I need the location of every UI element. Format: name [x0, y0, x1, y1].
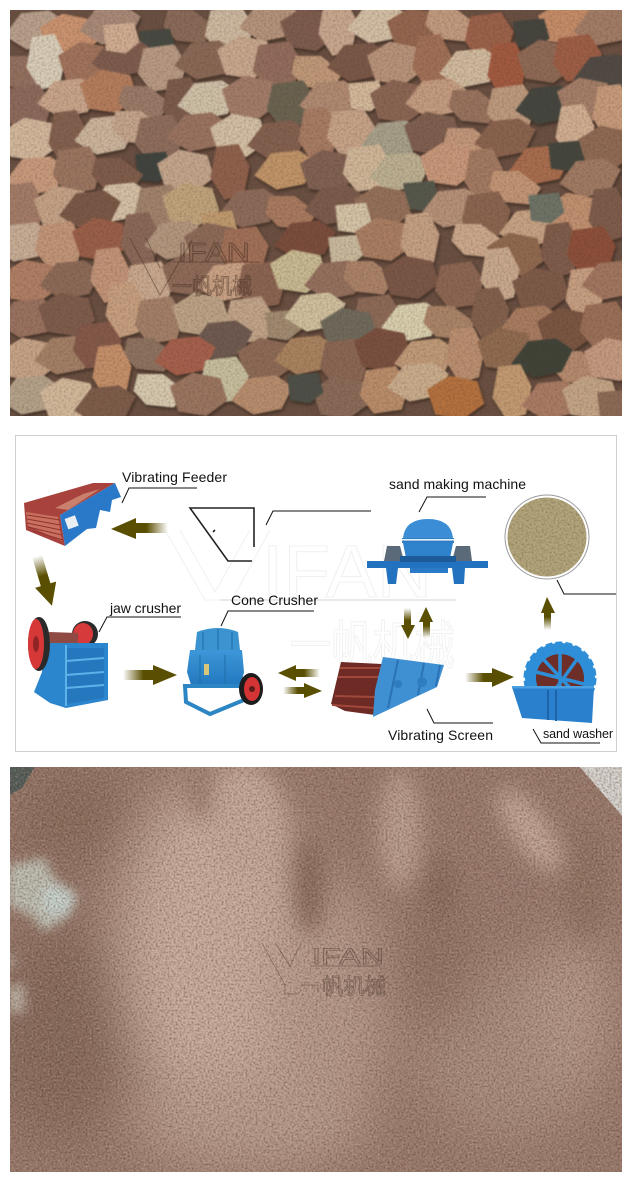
pale cloth showing through [8, 858, 78, 1013]
panel: finished granite sand photo [10, 767, 622, 1172]
label: Vibrating Feeder [122, 469, 227, 503]
leader line: hopper [266, 511, 371, 525]
watermark on sand: 帆机械 [322, 969, 386, 1001]
gravel stones [0, 0, 632, 425]
leader line: finished sand [557, 580, 616, 594]
watermark on gravel: 一帆机械 [172, 269, 252, 301]
label: jaw crusher: jaw crusher [109, 600, 181, 616]
icon: jaw crusher [28, 617, 108, 708]
watermark on gravel: IFAN [178, 237, 250, 267]
light and shadow folds in the sand [0, 760, 610, 1170]
dark corner and bag edges [8, 765, 624, 818]
arrow: sand washer to finished sand [541, 597, 555, 630]
arrow: crushed stone to feeder [111, 518, 168, 539]
label: sand making machine [389, 476, 526, 512]
label: Cone Crusher [221, 592, 318, 626]
watermark on sand: IFAN [312, 944, 384, 969]
icon: sand washer [512, 643, 595, 723]
icon: raw material hopper [190, 508, 254, 561]
label: sand washer: sand washer [543, 727, 613, 741]
label: sand making machine: sand making machine [389, 476, 526, 492]
faint watermark: IFAN [262, 530, 432, 613]
label: jaw crusher [99, 600, 181, 632]
arrow: feeder to jaw crusher [26, 553, 62, 609]
arrow: screen to sand maker [419, 607, 433, 638]
icon: vibrating screen [331, 657, 444, 717]
label: Vibrating Feeder: Vibrating Feeder [122, 469, 227, 485]
icon: sand making machine [367, 519, 488, 584]
icon: vibrating feeder [24, 483, 121, 546]
arrow: jaw crusher to cone crusher [123, 665, 177, 685]
faint watermark [165, 530, 456, 679]
watermark on gravel [130, 237, 260, 301]
icon: finished sand circle [505, 495, 589, 579]
panel: crushed granite gravel photo [10, 10, 622, 416]
panel: process flow diagram [15, 435, 617, 752]
arrow: screen to sand washer [465, 668, 514, 687]
label: Vibrating Screen: Vibrating Screen [388, 727, 493, 743]
icon: cone crusher [185, 628, 263, 714]
arrow: cone crusher to screen [283, 683, 322, 698]
arrow: sand maker to screen [401, 608, 415, 639]
label: Vibrating Screen [388, 709, 493, 743]
arrow: screen to cone crusher [278, 665, 320, 681]
faint watermark: 一帆机械 [290, 604, 455, 679]
label: Cone Crusher: Cone Crusher [231, 592, 318, 608]
watermark on sand [262, 943, 386, 1001]
